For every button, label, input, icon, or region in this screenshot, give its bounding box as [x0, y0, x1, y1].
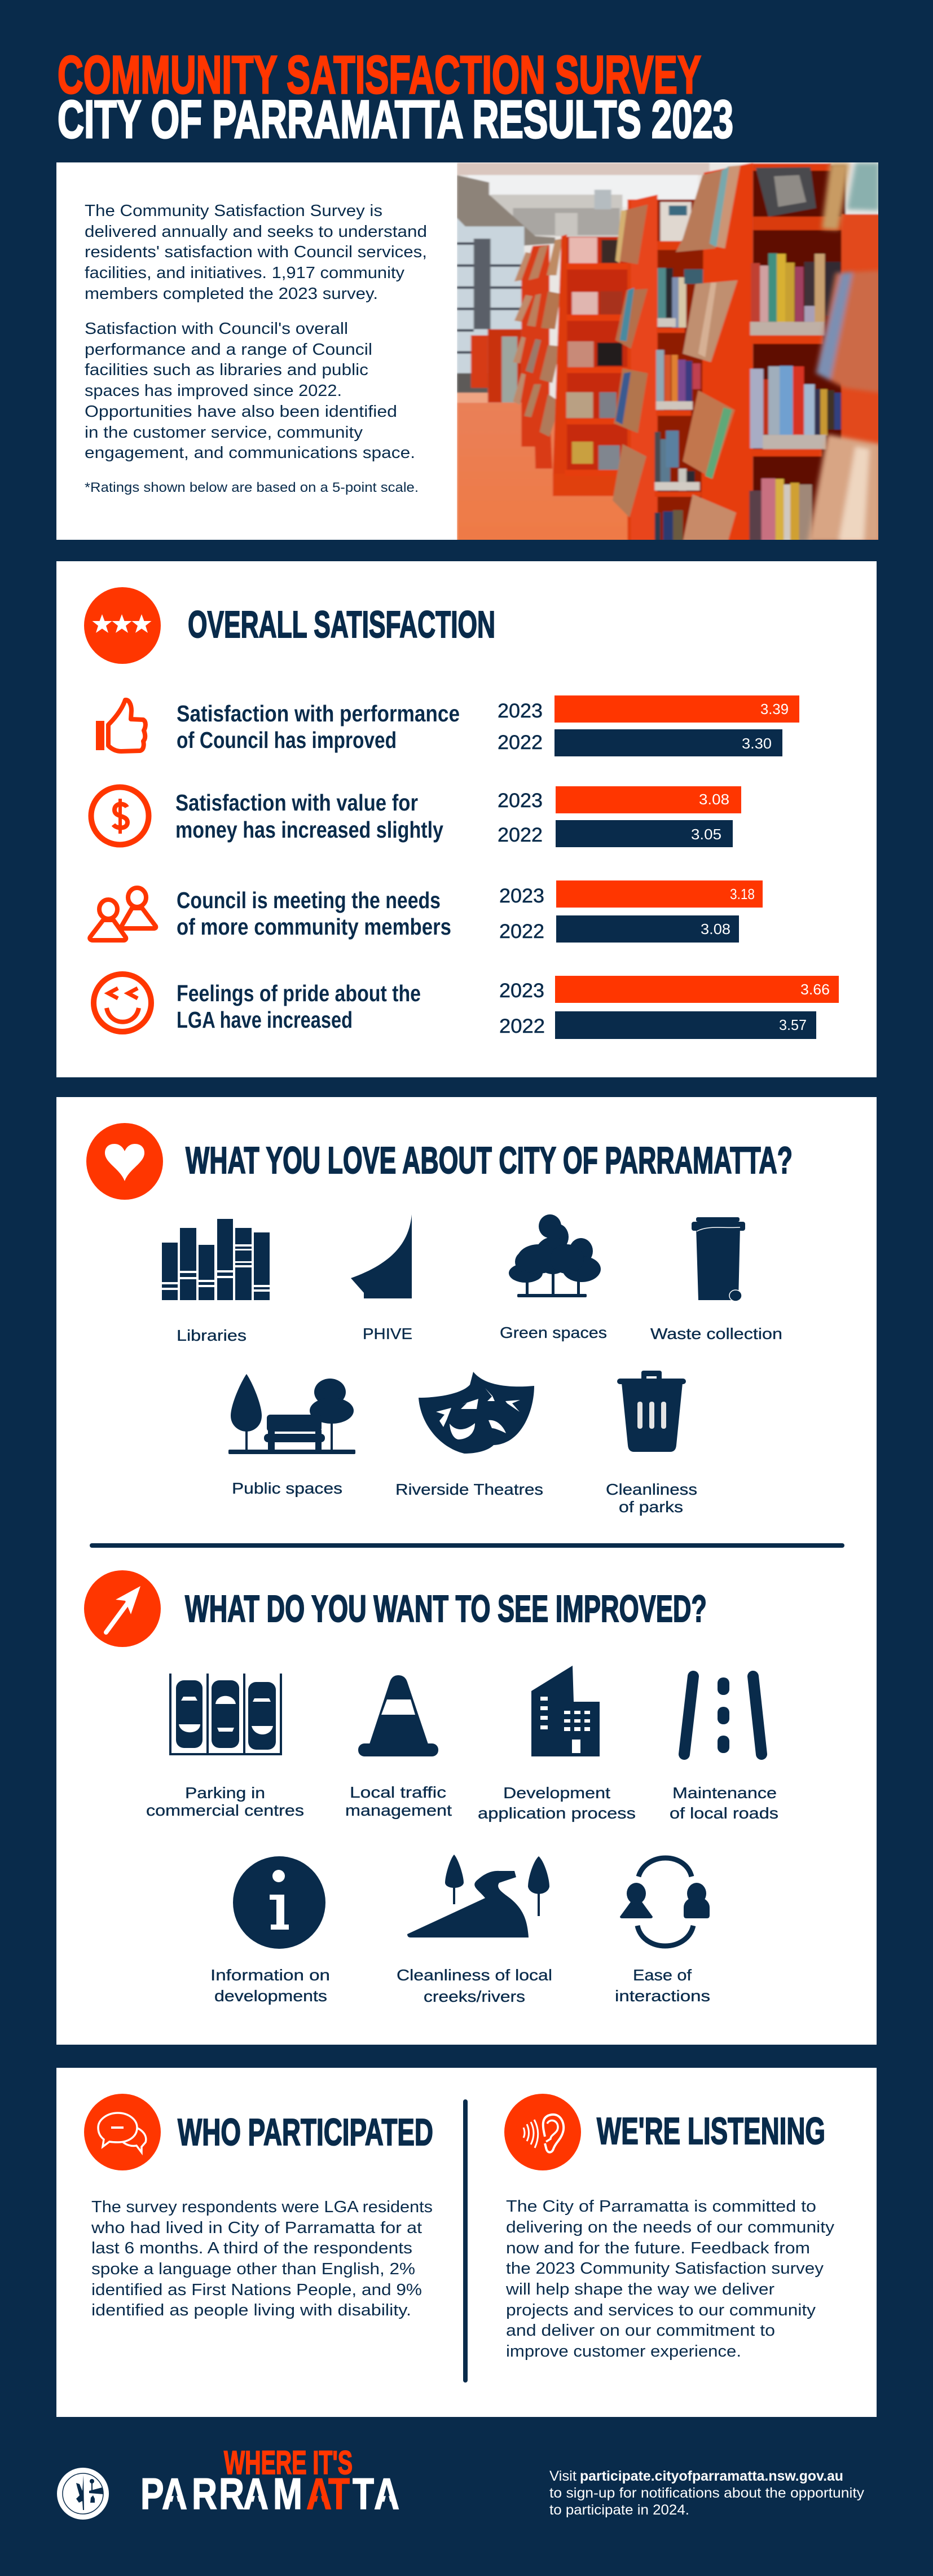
text: needs of community: of more community members — [177, 914, 451, 940]
text block: who participated: last 6 months. A third of the respondents — [91, 2239, 412, 2257]
row: pride about the LGA — [94, 974, 839, 1039]
text block: we're listening — [505, 2198, 835, 2361]
icon: green spaces trees — [509, 1214, 601, 1297]
text block: introduction: delivered annually and seeks to understand — [85, 223, 427, 241]
icon: two people — [90, 888, 156, 940]
text: value for money: money has increased slightly — [175, 817, 443, 843]
text: pride about the LGA — [177, 980, 421, 1033]
bar chart: pride about the LGA: 2023 — [499, 980, 544, 1002]
text block: who participated — [91, 2198, 433, 2319]
middle shelf — [567, 237, 630, 479]
text block: introduction: residents' satisfaction with Council services, — [85, 243, 427, 261]
text block: who participated: who had lived in City of Parramatta for at — [91, 2219, 422, 2237]
icon: traffic cone — [358, 1675, 438, 1756]
label: Parking in commercial centres: commercial centres — [146, 1802, 304, 1819]
label: Ease of interactions: Ease of — [633, 1966, 692, 1984]
bar chart: pride about the LGA: 3.57 — [779, 1016, 807, 1033]
bar chart: pride about the LGA — [499, 976, 839, 1039]
icon: parking — [169, 1674, 282, 1755]
bar chart: value for money: 2022 — [498, 824, 543, 846]
footer logo: where it's Parramatta — [140, 2445, 399, 2518]
bar chart: value for money: 3.05 — [691, 826, 721, 843]
footer call to action — [549, 2468, 865, 2518]
label: Cleanliness of local creeks/rivers — [397, 1966, 552, 2005]
label: Development application process — [478, 1784, 636, 1822]
label: Ease of interactions — [615, 1966, 710, 2005]
footer call to action: to participate in 2024. — [549, 2502, 689, 2518]
icon: theatre masks — [419, 1372, 534, 1454]
bar chart: performance of Council: 2023 — [498, 700, 543, 722]
footer call to action: Visit — [549, 2468, 576, 2484]
label: Cleanliness of parks: Cleanliness — [606, 1481, 697, 1498]
icon: PHIVE building — [351, 1214, 412, 1298]
label: Parking in commercial centres: Parking in — [185, 1784, 265, 1802]
label: Maintenance of local roads: Maintenance — [672, 1784, 777, 1802]
footer call to action: to sign-up for notifications about the opportunity — [549, 2485, 865, 2501]
row: value for money — [91, 786, 741, 847]
icon: people interaction — [620, 1858, 710, 1946]
icon: heart — [86, 1123, 163, 1200]
text: value for money: Satisfaction with value for — [175, 790, 418, 816]
text block: introduction: Satisfaction with Council's overall — [85, 320, 348, 338]
row: performance of Council — [96, 695, 799, 756]
label: Cleanliness of local creeks/rivers: Cleanliness of local — [397, 1966, 552, 1984]
icon: road — [684, 1676, 762, 1754]
text: performance of Council: of Council has improved — [177, 727, 397, 753]
icon: thumbs up — [96, 700, 146, 751]
label: Libraries: Libraries — [177, 1327, 247, 1344]
icon: dollar coin — [91, 787, 149, 845]
label: Cleanliness of parks — [606, 1481, 697, 1516]
near unit — [701, 163, 753, 542]
text block: introduction: *Ratings shown below are based on a 5-point scale. — [85, 480, 419, 495]
text block: introduction: facilities, and initiatives. 1,917 community — [85, 264, 405, 282]
text: performance of Council: Satisfaction with performance — [177, 701, 460, 726]
centre unit — [627, 200, 658, 542]
bar chart: performance of Council: 2022 — [498, 732, 543, 754]
text block: introduction: members completed the 2023 survey. — [85, 285, 378, 303]
heading: overall satisfaction: OVERALL SATISFACTION — [188, 604, 495, 646]
bar chart: performance of Council — [498, 695, 799, 756]
text block: introduction: performance and a range of Council — [85, 341, 372, 359]
text: performance of Council — [177, 701, 460, 753]
label: Ease of interactions: interactions — [615, 1987, 710, 2005]
icon: speech bubbles — [84, 2094, 161, 2170]
footer logo: where it's Parramatta: AT — [306, 2469, 350, 2518]
text block: we're listening: the 2023 Community Satisfaction survey — [506, 2260, 824, 2278]
label: Maintenance of local roads — [670, 1784, 778, 1822]
bar chart: pride about the LGA: 2022 — [499, 1015, 545, 1037]
text block: who participated: spoke a language other than English, 2% — [91, 2260, 415, 2278]
icon: creek and trees — [407, 1855, 549, 1937]
bar chart: needs of community — [499, 880, 763, 943]
footer logo: where it's Parramatta: TA — [353, 2469, 399, 2518]
text block: we're listening: improve customer experience. — [506, 2342, 741, 2361]
icon: smiling face — [94, 974, 151, 1032]
bar chart: needs of community: 3.18 — [730, 886, 755, 902]
label: PHIVE: PHIVE — [363, 1325, 412, 1342]
label: Information on developments — [210, 1966, 330, 2005]
bar chart: needs of community: 2022 — [499, 921, 544, 943]
text block: we're listening: projects and services to our community — [506, 2301, 816, 2319]
text block: who participated: The survey respondents were LGA residents — [91, 2198, 433, 2216]
text block: introduction: facilities such as libraries and public — [85, 361, 368, 379]
text block: introduction: The Community Satisfaction Survey is — [85, 202, 382, 220]
text block: introduction: Opportunities have also been identified — [85, 403, 397, 421]
text: needs of community — [177, 887, 451, 940]
text block: we're listening: will help shape the way we deliver — [505, 2280, 774, 2298]
heading: who participated: WHO PARTICIPATED — [178, 2111, 433, 2154]
title — [58, 45, 733, 149]
heading: we're listening: WE'RE LISTENING — [597, 2110, 825, 2152]
label: Cleanliness of local creeks/rivers: creeks/rivers — [424, 1988, 525, 2005]
panel: love and improve — [56, 1097, 877, 2045]
text block: who participated: identified as First Nations People, and 9% — [91, 2281, 422, 2299]
far shelves — [521, 245, 552, 469]
label: Local traffic management — [345, 1784, 452, 1819]
text block: we're listening: The City of Parramatta is committed to — [506, 2198, 816, 2216]
label: Waste collection: Waste collection — [650, 1325, 782, 1342]
bar chart: performance of Council: 3.30 — [742, 735, 772, 752]
text block: introduction — [85, 202, 427, 495]
label: Local traffic management: Local traffic — [350, 1784, 446, 1801]
label: Information on developments: developments — [214, 1987, 327, 2005]
label: Green spaces: Green spaces — [500, 1324, 607, 1341]
text block: introduction: spaces has improved since 2022. — [85, 382, 342, 400]
text block: we're listening: and deliver on our commitment to — [506, 2322, 775, 2340]
text block: we're listening: now and for the future. Feedback from — [506, 2239, 810, 2257]
bar chart: performance of Council: 3.39 — [760, 701, 789, 717]
text: needs of community: Council is meeting the needs — [177, 887, 441, 913]
icon: three stars — [84, 587, 161, 664]
icon: wheelie bin — [692, 1217, 745, 1301]
footer logo: where it's Parramatta: PARRAM — [140, 2469, 302, 2518]
panel: introduction — [56, 162, 881, 542]
label: Maintenance of local roads: of local roads — [670, 1804, 778, 1822]
footer crest — [57, 2468, 109, 2520]
label: Development application process: application process — [478, 1804, 636, 1822]
footer logo: where it's Parramatta: WHERE IT'S — [224, 2445, 353, 2481]
panel: who participated and listening — [56, 2068, 877, 2417]
row: needs of community — [90, 880, 763, 943]
text: pride about the LGA: Feelings of pride about the — [177, 980, 421, 1006]
label: Local traffic management: management — [345, 1802, 452, 1819]
bar chart: value for money: 2023 — [498, 790, 543, 812]
icon: rubbish bin — [617, 1371, 686, 1452]
label: Development application process: Development — [503, 1784, 610, 1802]
text block: we're listening: delivering on the needs of our community — [506, 2218, 835, 2236]
label: Information on developments: Information on — [210, 1966, 330, 1984]
panel: overall satisfaction — [56, 561, 877, 1077]
icon: books — [162, 1219, 270, 1300]
label: Riverside Theatres: Riverside Theatres — [395, 1481, 543, 1498]
text: value for money — [175, 790, 443, 843]
label: Parking in commercial centres — [146, 1784, 304, 1819]
text block: introduction: engagement, and communications space. — [85, 444, 415, 462]
bar chart: value for money — [498, 786, 741, 847]
bar chart: pride about the LGA: 3.66 — [800, 981, 830, 998]
icon: public spaces bench — [228, 1374, 355, 1454]
text block: introduction: in the customer service, community — [85, 424, 363, 442]
icon: information — [233, 1856, 325, 1949]
footer call to action: participate.cityofparramatta.nsw.gov.au — [580, 2468, 843, 2484]
photo: library shelves — [457, 163, 881, 542]
bar chart: needs of community: 2023 — [499, 885, 544, 907]
label: Cleanliness of parks: of parks — [619, 1498, 683, 1516]
bar chart: value for money: 3.08 — [699, 791, 729, 808]
bar chart: needs of community: 3.08 — [701, 921, 730, 937]
label: Public spaces: Public spaces — [232, 1479, 342, 1497]
text: pride about the LGA: LGA have increased — [177, 1007, 353, 1033]
icon: upward arrow — [84, 1570, 161, 1647]
icon: ear and sound waves — [504, 2094, 581, 2170]
text block: who participated: identified as people living with disability. — [91, 2301, 411, 2319]
icon: building — [531, 1666, 600, 1756]
